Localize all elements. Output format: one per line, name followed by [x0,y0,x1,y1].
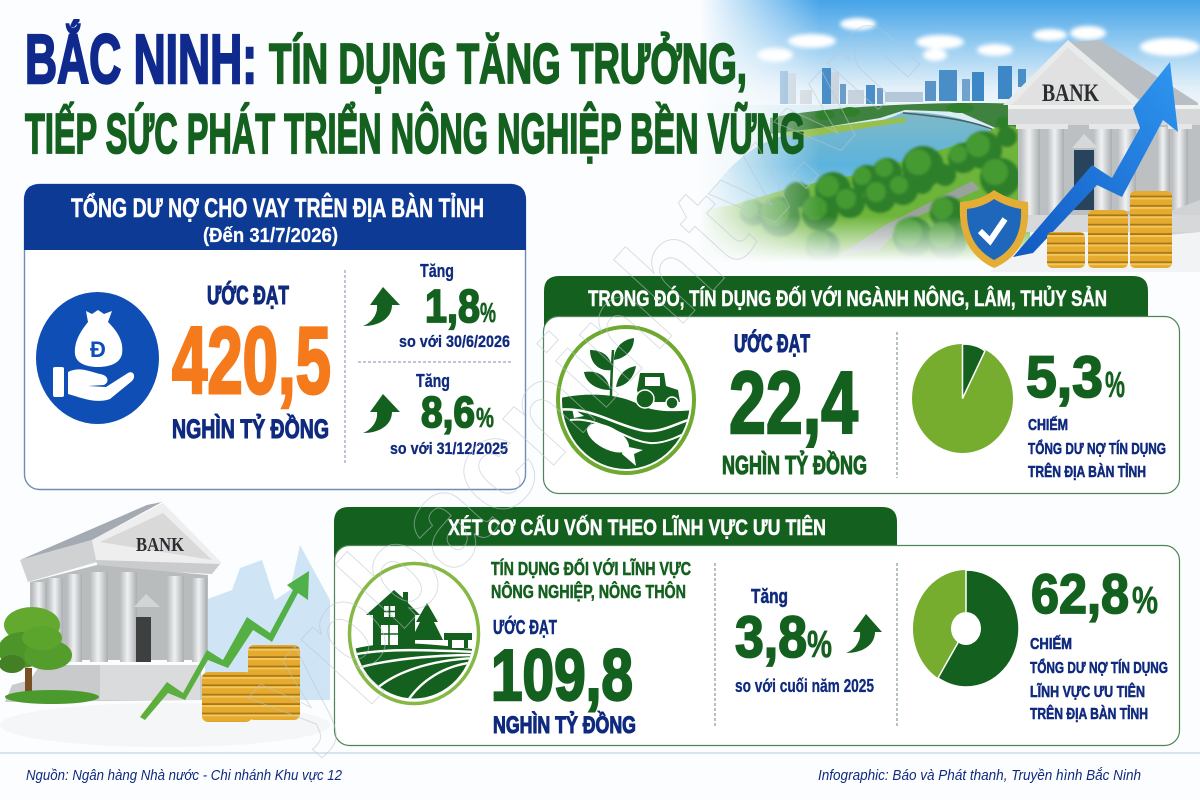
increase versus 31/12/2025: 8,6 [421,388,475,437]
icon: crop, tractor and fish [555,327,695,480]
big number 109,8: 109,8 [491,636,633,716]
big number 420,5: 420,5 [172,308,331,414]
arrow up [363,394,400,433]
unit: NGHÌN TỶ ĐỒNG [172,412,329,444]
increase versus 31/12/2025: % [476,402,494,433]
increase 3.8%: Tăng [751,586,788,608]
panel: capital structure by priority sector [334,507,1180,746]
arrow up [846,614,882,653]
heading: XÉT CƠ CẤU VỐN THEO LĨNH VỰC ƯU TIÊN [448,514,826,540]
shield with check mark [960,190,1028,268]
arrow up [363,287,400,326]
increase 3.8%: so với cuối năm 2025 [735,676,874,696]
footer source: Nguồn: Ngân hàng Nhà nước - Chi nhánh Khu vực 12 [26,767,343,784]
illustration: city, river and park landscape [690,0,1200,270]
date subheading: (Đến 31/7/2026) [203,225,338,247]
panel: total outstanding loans [24,184,526,490]
coin stacks [1047,191,1172,268]
increase 3.8%: 3,8 [735,605,807,670]
green growth arrow [140,571,309,720]
sector name: NÔNG NGHIỆP, NÔNG THÔN [491,581,686,602]
panel: agriculture, forestry, fishery credit [544,276,1180,494]
title: TÍN DỤNG TĂNG TRƯỞNG, [269,31,747,96]
tree [0,607,72,700]
share text: 5,3 [1026,345,1103,410]
ground under bank [990,232,1200,272]
label: ƯỚC ĐẠT [734,328,810,358]
share text [1030,562,1168,723]
increase versus 30/6/2026: so với 30/6/2026 [399,332,510,351]
icon: farmhouse and fields [350,564,480,705]
increase versus 30/6/2026: % [480,297,496,328]
share text: TRÊN ĐỊA BÀN TỈNH [1028,462,1146,481]
share text: % [1132,580,1158,622]
increase versus 31/12/2025: so với 31/12/2025 [390,439,508,458]
illustration: bank with green arrow, tree and coins [0,502,330,747]
share text: % [1105,364,1125,405]
share text: CHIẾM [1028,415,1068,434]
increase 3.8% [735,586,882,696]
increase 3.8%: % [807,624,832,666]
footer credit: Infographic: Báo và Phát thanh, Truyền hình Bắc Ninh [818,767,1141,784]
sector name [491,558,691,602]
label: ƯỚC ĐẠT [493,615,557,639]
increase versus 30/6/2026: Tăng [420,261,454,281]
bush [5,690,99,704]
share text: TRÊN ĐỊA BÀN TỈNH [1030,704,1148,723]
share text: CHIẾM [1030,634,1072,653]
icon: money bag in hand [36,292,159,424]
share text: LĨNH VỰC ƯU TIÊN [1030,681,1145,701]
increase versus 30/6/2026: 1,8 [425,280,480,332]
bank label: BANK [136,534,184,556]
unit: NGHÌN TỶ ĐỒNG [493,710,636,739]
illustration: bank with blue arrow, shield and coins [960,40,1200,272]
unit: NGHÌN TỶ ĐỒNG [722,450,867,480]
far shore [770,103,1020,134]
pie chart 5.3% [912,344,1013,453]
share text: 62,8 [1031,562,1129,625]
share text [1026,345,1166,481]
icon: money bag in hand: Đ [90,337,106,362]
big number 22,4: 22,4 [729,353,858,452]
title [25,19,805,166]
park ground [706,126,1030,260]
blue growth arrow [1013,62,1178,257]
bank label: BANK [1042,80,1099,107]
increase versus 31/12/2025 [363,371,508,458]
increase versus 31/12/2025: Tăng [416,371,450,391]
heading: TỔNG DƯ NỢ CHO VAY TRÊN ĐỊA BÀN TỈNH [71,191,484,223]
increase versus 30/6/2026 [363,261,510,351]
big number label: ƯỚC ĐẠT [207,280,289,310]
sector name: TÍN DỤNG ĐỐI VỚI LĨNH VỰC [491,558,691,579]
title: BẮC NINH: [25,19,257,98]
coin stacks [202,645,300,722]
donut chart 62.8% [913,570,1019,687]
